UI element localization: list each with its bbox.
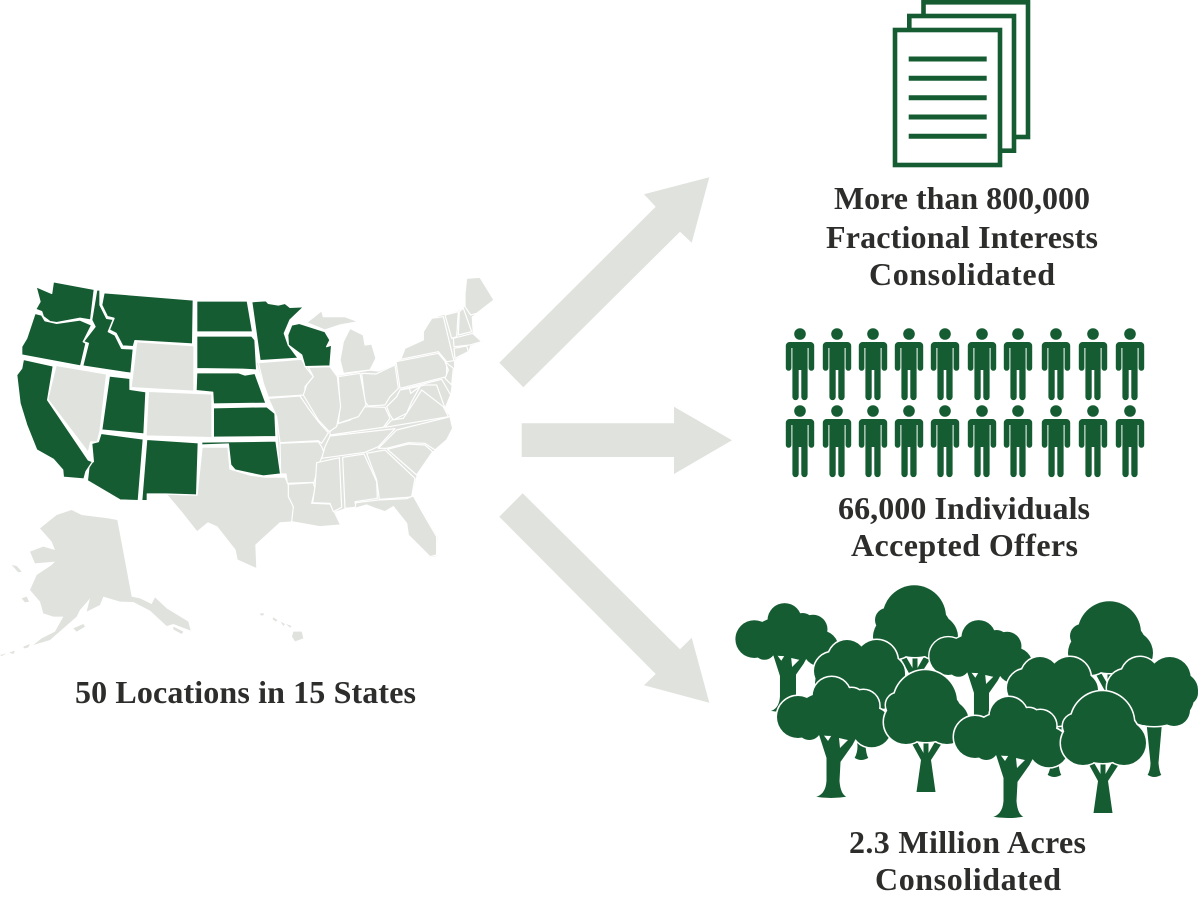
text: acres: Consolidated <box>875 861 1061 897</box>
arrow: down to acres <box>499 493 709 703</box>
text: individuals: 66,000 Individuals <box>838 490 1090 526</box>
text: acres <box>849 824 1086 897</box>
icon: forest of trees <box>735 585 1198 818</box>
text: fractional interests: Fractional Interests <box>826 219 1098 255</box>
Texas <box>166 447 294 569</box>
text: acres: 2.3 Million Acres <box>849 824 1086 860</box>
text: fractional interests <box>826 180 1098 292</box>
text: fractional interests: More than 800,000 <box>834 180 1090 216</box>
western gray states <box>48 342 212 453</box>
eastern gray states <box>258 277 494 557</box>
text: individuals <box>838 490 1090 563</box>
person row 2 <box>786 405 1144 477</box>
arrow: across to individuals <box>522 407 732 474</box>
text: fractional interests: Consolidated <box>869 256 1055 292</box>
arrow: up to fractional interests <box>499 177 709 387</box>
map: United States with 15 highlighted states <box>0 277 494 656</box>
text: individuals: Accepted Offers <box>851 527 1078 563</box>
map caption: 50 Locations in 15 States <box>75 674 416 710</box>
Alaska and Hawaii <box>0 510 303 656</box>
icon: stack of documents <box>895 2 1028 165</box>
icon: rows of people <box>786 328 1144 477</box>
eastern landmass base <box>257 277 494 557</box>
person row 1 <box>786 328 1144 400</box>
western highlighted states <box>17 282 281 501</box>
Minnesota and Wisconsin <box>252 301 332 367</box>
